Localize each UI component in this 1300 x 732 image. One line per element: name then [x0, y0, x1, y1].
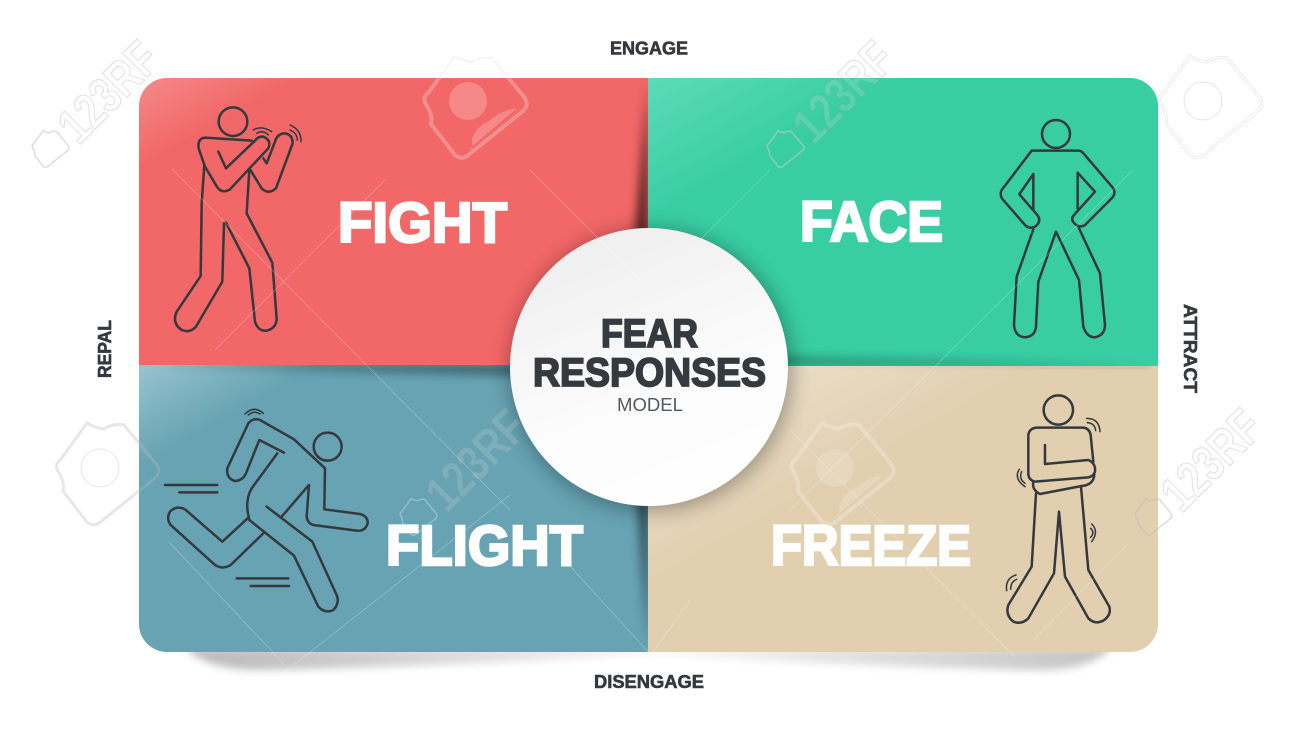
watermark: logo text 3 — [381, 399, 538, 556]
panel: fight — [139, 78, 648, 365]
watermark: logo text 2: 123RF — [782, 31, 905, 154]
panel: freeze — [648, 366, 1158, 652]
watermark: stamp 2 — [1159, 56, 1262, 158]
center circle — [510, 228, 792, 511]
axis label: repal: REPAL — [95, 320, 115, 378]
icon: fight figure — [175, 107, 301, 331]
watermark: logo text 4 — [1116, 399, 1273, 556]
watermark: logo text 4: 123RF — [1150, 399, 1273, 522]
center title: RESPONSES — [533, 351, 766, 395]
panel: face — [648, 78, 1158, 366]
watermark: logo text 2 — [748, 31, 905, 188]
axis label: engage: ENGAGE — [610, 38, 688, 58]
label: fight: FIGHT — [338, 191, 507, 255]
watermark: stamp 4 — [791, 423, 894, 525]
center title: FEAR — [601, 312, 698, 356]
icon: face figure — [1001, 120, 1115, 337]
watermark: logo text 1 — [13, 31, 170, 188]
watermark: logo text 3: 123RF — [415, 399, 538, 522]
center title: MODEL — [617, 395, 683, 415]
watermark: logo text 1: 123RF — [47, 31, 170, 154]
watermark: stamp 3 — [56, 423, 159, 525]
panel shadow — [185, 648, 1112, 670]
icon: freeze figure — [1006, 395, 1110, 623]
label: freeze: FREEZE — [771, 514, 971, 578]
axis label: attract: ATTRACT — [1180, 304, 1200, 393]
axis label: disengage: DISENGAGE — [594, 672, 704, 692]
center title — [533, 312, 766, 415]
label: face: FACE — [800, 190, 943, 254]
icon: flight figure — [165, 409, 368, 611]
panel: flight — [139, 365, 648, 652]
label: flight: FLIGHT — [386, 514, 583, 578]
watermark: stamp 1 — [424, 56, 527, 158]
